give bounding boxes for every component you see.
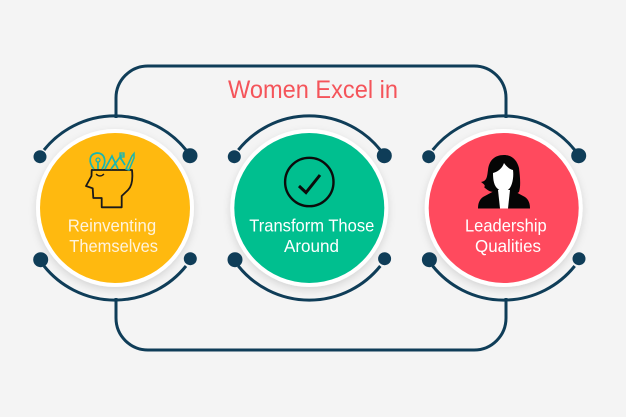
icon: head with ideas xyxy=(86,153,134,207)
title: Women Excel in xyxy=(228,76,398,104)
label: Around xyxy=(284,236,339,256)
yellow disc xyxy=(40,133,190,283)
panel: leadership qualities xyxy=(422,116,586,300)
label: Reinventing xyxy=(68,216,156,236)
red disc xyxy=(429,133,579,283)
arcs and dots xyxy=(422,116,586,300)
top connector frame xyxy=(116,66,506,118)
white ring xyxy=(36,129,194,287)
white ring xyxy=(230,129,388,287)
label: Transform Those xyxy=(249,216,374,236)
panel: reinventing themselves xyxy=(33,116,198,300)
bottom connector frame xyxy=(116,298,506,350)
icon: check circle xyxy=(285,158,333,206)
icon: woman xyxy=(478,155,530,208)
white ring xyxy=(425,129,583,287)
panel: transform those around xyxy=(228,116,392,300)
arcs and dots xyxy=(228,116,392,300)
green disc xyxy=(234,133,384,283)
label: Qualities xyxy=(475,236,541,256)
label: Themselves xyxy=(69,236,158,256)
label: Leadership xyxy=(465,216,547,236)
arcs and dots xyxy=(33,116,198,300)
